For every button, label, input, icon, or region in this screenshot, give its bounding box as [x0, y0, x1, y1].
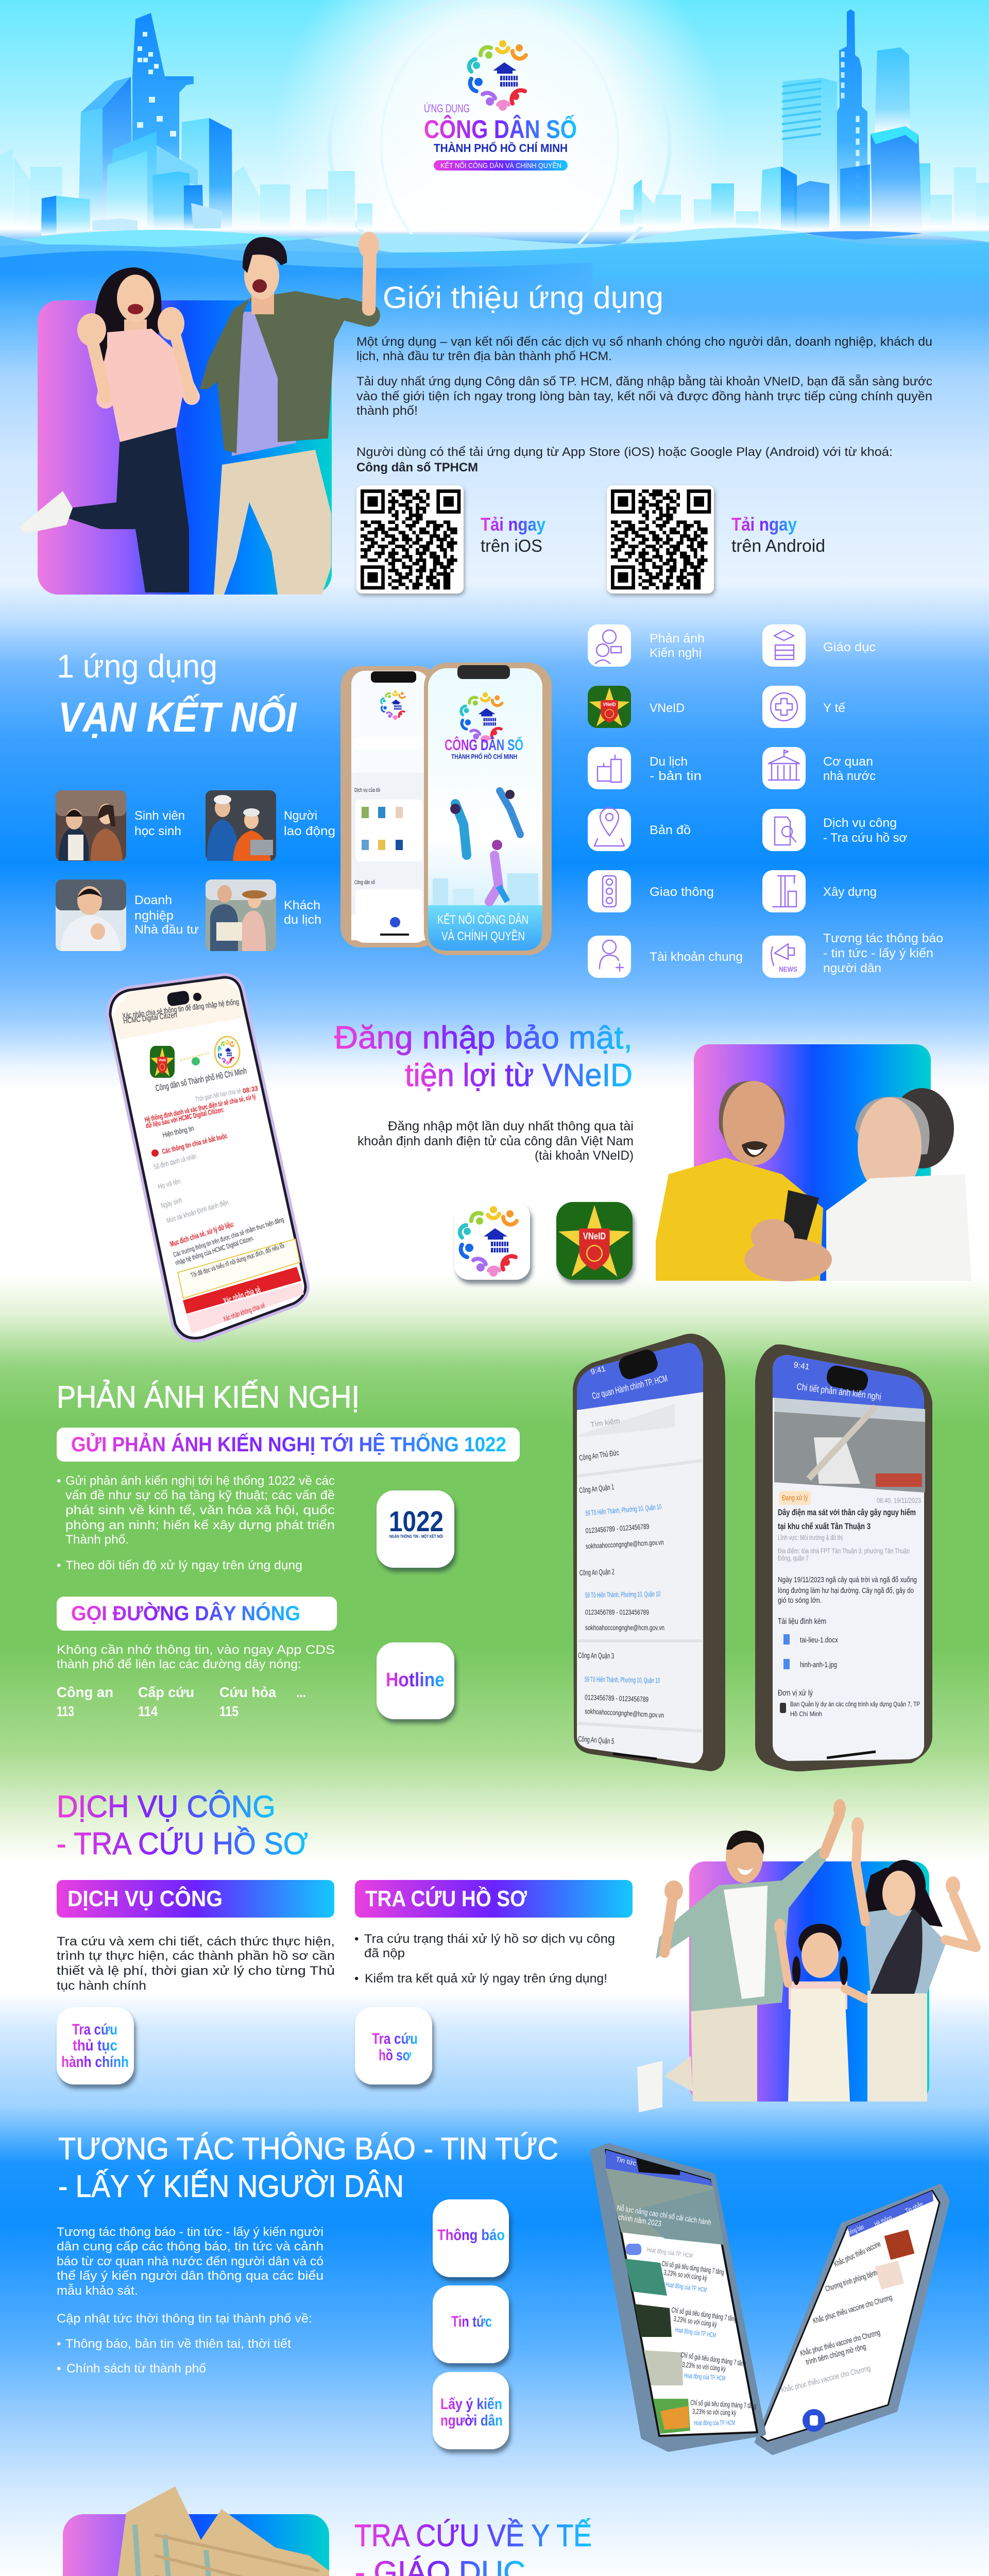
feedback bullets: • — [57, 1474, 61, 1488]
tilted phone: VNeID consent screen: HCMC Digital Citizen — [123, 1010, 178, 1026]
tile: 1022: NGÀN THÔNG TIN - MỘT KẾT NỐI — [389, 1534, 443, 1539]
tilted phone: VNeID consent screen: Hiện thông tin — [162, 1124, 195, 1139]
tile: Dịch vụ công tra cứu hồ sơ: Dịch vụ công — [823, 816, 897, 830]
notification paragraph: mẫu khảo sát. — [57, 2284, 138, 2298]
tile: Giao thông: Giao thông — [650, 885, 714, 899]
tile: tra cứu hồ sơ: hồ sơ — [379, 2047, 412, 2064]
hotline numbers: 115 — [219, 1703, 238, 1719]
panel: family photo — [637, 1799, 976, 2112]
phone: feedback detail: Tài liệu đính kèm — [778, 1617, 826, 1626]
feedback bullets: phát sinh về kinh tế, văn hóa xã hội, quốc — [65, 1503, 335, 1517]
phone: news list: Tin tức — [615, 2155, 637, 2167]
VNeID text — [357, 1119, 634, 1163]
intro paragraphs: Tải duy nhất ứng dụng Công dân số TP. HCM, đăng nhập bằng tài khoản VNeID, bạn đã sẵn sàng bước — [356, 374, 932, 388]
tile: tra cứu thủ tục hành chính: thủ tục — [73, 2037, 117, 2054]
hotline numbers: Cấp cứu — [138, 1684, 194, 1700]
phone: news list: Hoạt động của TP. HCM — [694, 2419, 735, 2427]
hotline text — [57, 1643, 335, 1671]
notification paragraph: • — [57, 2362, 61, 2376]
tilted phone: VNeID consent screen: 08:33 — [242, 1084, 259, 1095]
tile: Dịch vụ công tra cứu hồ sơ: - Tra cứu hồ sơ — [823, 831, 907, 845]
records bullets: Tra cứu trạng thái xử lý hồ sơ dịch vụ công — [364, 1932, 615, 1946]
tile: Bản đồ — [588, 808, 691, 851]
persona label: Khách — [284, 899, 320, 912]
phone: agencies list: Công An Thủ Đức — [578, 1448, 620, 1463]
tile: Cơ quan nhà nước: Cơ quan — [823, 755, 873, 769]
persona: sinh viên học sinh — [56, 790, 185, 861]
public service paragraph: tục hành chính — [57, 1979, 146, 1993]
feedback bullets: phòng an ninh; hiến kế xây dựng phát triển — [65, 1518, 335, 1532]
woman jumping — [19, 267, 192, 592]
section heading: Dịch vụ công: - TRA CỨU HỒ SƠ — [57, 1826, 308, 1861]
hotline text: Không cần nhớ thông tin, vào ngay App CDS — [57, 1643, 335, 1657]
phone: news list: Chỉ số giá tiêu dùng tháng 7 tăng — [671, 2306, 738, 2323]
phone: agencies list: Công An Quận 3 — [578, 1651, 614, 1660]
persona label: lao động — [284, 824, 335, 838]
tilted phone: VNeID consent screen: Mức tài khoản Định danh điện — [165, 1198, 229, 1225]
feature tiles grid — [588, 624, 943, 978]
persona label — [134, 893, 199, 937]
persona label: Nhà đầu tư — [134, 923, 199, 937]
feedback bullets: Thành phố. — [65, 1533, 129, 1547]
section: 1 ứng dụng vạn kết nối heading — [57, 648, 297, 741]
man jumping — [200, 232, 379, 595]
public service paragraph: Tra cứu và xem chi tiết, cách thức thực hiện, — [57, 1935, 335, 1948]
phone: notifications list: Khắc phục thiếu vaccine cho Chương — [780, 2364, 872, 2395]
phone: feedback detail: 08:40, 19/11/2023 — [877, 1496, 921, 1504]
logo caption: ỨNG DỤNG — [424, 102, 470, 115]
VNeID text: (tài khoản VNeID) — [535, 1148, 634, 1163]
phone: agencies list: Công An Quận 5 — [578, 1735, 615, 1746]
banner: tra cứu hồ sơ: TRA CỨU HỒ SƠ — [365, 1886, 527, 1911]
tilted phone: VNeID consent screen: Các trường thông tin trên được chia sẻ nhằm thực hiện đăng — [172, 1215, 285, 1259]
hotline numbers: 114 — [138, 1703, 158, 1719]
logo city: THÀNH PHỐ HỒ CHÍ MINH — [434, 141, 568, 155]
tile: Tương tác thông báo: - tin tức - lấy ý kiến — [823, 946, 933, 960]
section heading: Dịch vụ công — [57, 1789, 308, 1861]
phone: news list: 3,23% so với cùng kỳ — [692, 2407, 736, 2417]
banner: gửi phản ánh: GỬI PHẢN ÁNH KIẾN NGHỊ TỚI HỆ THỐNG 1022 — [71, 1432, 506, 1456]
man in yellow shirt — [656, 1081, 823, 1281]
tile: Du lịch bản tin: - bản tin — [650, 769, 702, 783]
persona label: du lịch — [284, 913, 321, 927]
tile: tra cứu thủ tục hành chính: hành chính — [61, 2054, 129, 2071]
tile: Tương tác thông báo — [762, 931, 943, 978]
phone: agencies list: 59 Tô Hiến Thành, Phường 10, Quận 10 — [585, 1675, 660, 1685]
persona label: Sinh viên — [134, 809, 185, 823]
persona label: học sinh — [134, 824, 181, 838]
phones: app splash and home — [340, 663, 552, 955]
tilted phone: VNeID consent screen: Ngày sinh — [160, 1196, 183, 1210]
phone: agencies list: 59 Tô Hiến Thành, Phường 10, Quận 10 — [585, 1589, 660, 1599]
tile: Hotline — [377, 1642, 454, 1719]
phone: feedback detail: tai-lieu-1.docx — [800, 1636, 838, 1645]
hotline numbers: Cứu hỏa — [219, 1684, 276, 1700]
phone: agencies list: sokhoahoccongnghe@hcm.gov.vn — [585, 1538, 664, 1550]
phone: agencies list: sokhoahoccongnghe@hcm.gov.vn — [585, 1707, 664, 1719]
phone: news list — [593, 2146, 763, 2449]
tile: Phản ánh kiến nghị: Kiến nghị — [650, 646, 702, 660]
phone: agencies list: Công An Quận 2 — [579, 1568, 615, 1578]
tile: Dịch vụ công tra cứu hồ sơ — [762, 809, 907, 851]
section heading: Tra cứu về y tế — [354, 2518, 592, 2576]
banner: tra cứu hồ sơ — [355, 1880, 633, 1918]
tile: Xây dựng — [762, 870, 877, 912]
phone: feedback detail: 9:41 — [793, 1361, 810, 1371]
phone: feedback detail: Đông, quận 7 — [778, 1554, 809, 1562]
phone in hand — [744, 1190, 832, 1281]
tile: VNeID — [588, 686, 685, 728]
tile: Xây dựng: Xây dựng — [823, 885, 877, 899]
phone: news list: 3,23% so với cùng kỳ — [663, 2268, 708, 2282]
persona label — [284, 809, 335, 838]
faint right skyline — [620, 163, 989, 227]
tile: Cơ quan nhà nước — [762, 747, 876, 789]
heading: Đăng nhập bảo mật — [334, 1020, 633, 1093]
tilted phone: VNeID consent screen — [110, 977, 305, 1338]
tile: Tin tức: Tin tức — [451, 2313, 492, 2330]
app icon: Công dân số — [454, 1202, 530, 1280]
records bullets: đã nộp — [364, 1946, 405, 1960]
section heading: Tương tác thông báo: - LẤY Ý KIẾN NGƯỜI DÂN — [58, 2169, 404, 2204]
intro paragraphs: Một ứng dụng – vạn kết nối đến các dịch vụ số nhanh chóng cho người dân, doanh nghiệp, khách du — [356, 335, 932, 349]
section: 1 ứng dụng vạn kết nối heading: 1 ứng dụng — [57, 648, 217, 685]
tile: Phản ánh kiến nghị — [588, 624, 705, 667]
heading: Đăng nhập bảo mật: Đăng nhập bảo mật, — [334, 1020, 633, 1056]
tile: Thông báo — [433, 2199, 509, 2277]
phone: agencies list: 9:41 — [590, 1364, 606, 1377]
tile: Giáo dục: Giáo dục — [823, 640, 876, 654]
section heading: Tương tác thông báo: TƯƠNG TÁC THÔNG BÁO - TIN TỨC — [58, 2131, 558, 2166]
notification paragraph: Cập nhật tức thời thông tin tại thành phố về: — [57, 2312, 312, 2326]
tile: 1022 — [377, 1490, 454, 1568]
tilted phone: VNeID consent screen: dữ liệu sau với HCMC Digital Citizen: — [145, 1105, 225, 1130]
notification paragraph: • — [57, 2337, 61, 2351]
label platform: trên Android — [731, 536, 825, 556]
persona: khách du lịch — [206, 879, 321, 951]
phone: news list: Chỉ số giá tiêu dùng tháng 7 tăng — [690, 2398, 757, 2410]
tilted phone: VNeID consent screen: Xác nhận chia sẻ — [222, 1284, 262, 1307]
woman in white shirt — [826, 1088, 971, 1281]
phone: feedback detail: Ngày 19/11/2023 ngã cây quá trời và ngã đổ xuống — [778, 1575, 917, 1584]
tile: Giao thông — [588, 870, 714, 912]
phone: news list: Chỉ số giá tiêu dùng tháng 7 tăng — [680, 2350, 747, 2368]
phone: agencies list: Cơ quan Hành chính TP. HCM — [591, 1373, 669, 1401]
tilted phone: VNeID consent screen: Công dân số Thành phố Hồ Chí Minh — [155, 1066, 247, 1093]
front phone splash screen: VÀ CHÍNH QUYỀN — [441, 929, 525, 943]
QR download iOS — [356, 485, 545, 594]
phone: news list: Hoạt động của TP. HCM — [684, 2371, 726, 2382]
phone: feedback detail: lòng đường làm hư hại đường. Cây ngã đổ, gây do — [778, 1586, 914, 1595]
back phone home screen — [340, 666, 438, 947]
persona label — [134, 809, 185, 838]
records bullets: • — [354, 1932, 359, 1946]
phone: feedback detail: Đơn vị xử lý — [778, 1689, 813, 1698]
notification paragraph: báo từ cơ quan nhà nước đến người dân và có — [57, 2255, 323, 2268]
phone: notifications list: Khắc phục thiếu vaccine — [833, 2240, 882, 2269]
intro paragraphs: Công dân số TPHCM — [356, 461, 478, 474]
feedback bullets: • — [57, 1558, 61, 1572]
faint left skyline — [0, 148, 372, 230]
app icon: VNeID — [556, 1202, 633, 1280]
panel: hospital and school photo — [0, 2486, 329, 2576]
front phone splash screen: CÔNG DÂN SỐ — [445, 736, 523, 754]
phone: agencies list: Tìm kiếm — [590, 1416, 620, 1429]
logo tagline pill: KẾT NỐI CÔNG DÂN VÀ CHÍNH QUYỀN — [440, 161, 561, 170]
man — [637, 1799, 846, 2112]
hotline numbers: 113 — [57, 1703, 74, 1719]
tile: Tài khoản chung — [588, 936, 743, 978]
tile: 1022: 1022 — [389, 1505, 444, 1537]
notification paragraph — [57, 2225, 323, 2376]
phone: feedback detail: Lĩnh vực: Môi trường & đô thị — [778, 1533, 843, 1541]
section heading: Dịch vụ công: DỊCH VỤ CÔNG — [57, 1789, 276, 1824]
phone: notifications list: Chương trình phòng bệnh — [824, 2268, 878, 2294]
notification paragraph: thể lấy ý kiến người dân thông qua các biểu — [57, 2269, 323, 2283]
phone: agencies list: 59 Tô Hiến Thành, Phường 10, Quận 10 — [585, 1502, 662, 1517]
hotline text: thành phố để liên lạc các đường dây nóng: — [57, 1657, 301, 1671]
tilted phone: VNeID consent screen: Mục đích chia sẻ, xử lý dữ liệu: — [169, 1219, 235, 1249]
tile: Tương tác thông báo: Tương tác thông báo — [823, 931, 943, 945]
hotline numbers: ... — [296, 1684, 306, 1700]
tile: Lấy ý kiến người dân — [433, 2372, 509, 2449]
phone: agencies list: 0123456789 - 0123456789 — [585, 1522, 650, 1535]
back phone home screen: Công dân số — [354, 879, 375, 886]
label: Tải ngay — [481, 514, 545, 535]
feedback bullets: vấn đề như sự cố hạ tầng kỹ thuật; các vấn đề — [65, 1488, 335, 1502]
phone: feedback detail: Đang xử lý — [782, 1494, 808, 1502]
phone: news list: Hoạt động của TP. HCM — [666, 2280, 707, 2294]
label platform: trên iOS — [481, 536, 542, 556]
section: 1 ứng dụng vạn kết nối heading: VẠN KẾT NỐI — [58, 693, 297, 741]
records bullets — [354, 1932, 615, 1986]
section heading: Tra cứu về y tế: TRA CỨU VỀ Y TẾ — [354, 2518, 592, 2553]
tilted phone: VNeID consent screen: Hệ thống định danh và xác thực điện tử sẽ chia sẻ, xử lý — [144, 1092, 257, 1124]
tile: Lấy ý kiến người dân: Lấy ý kiến — [440, 2396, 502, 2413]
intro paragraphs: lịch, nhà đầu tư trên địa bàn thành phố HCM. — [356, 349, 612, 363]
phone: notifications list — [757, 2186, 948, 2453]
feedback bullets: Theo dõi tiến độ xử lý ngay trên ứng dụng — [65, 1558, 302, 1572]
phone: notifications list: trình tiêm chủng mở rộng — [805, 2342, 867, 2367]
banner: dịch vụ công: DỊCH VỤ CÔNG — [67, 1885, 223, 1911]
phone: agencies list — [573, 1334, 725, 1771]
banner: dịch vụ công — [57, 1880, 334, 1918]
persona: doanh nghiệp nhà đầu tư — [56, 879, 199, 951]
phone: feedback detail: Dây điện ma sát với thân cây gây nguy hiểm — [778, 1507, 916, 1517]
phone: notifications list: Khắc phục thiếu vaccine cho Chương — [799, 2328, 881, 2358]
hospital tower — [116, 2486, 329, 2576]
public service paragraph: trình tự thực hiện, các thành phần hồ sơ cần — [57, 1949, 335, 1963]
notification paragraph: dân cung cấp các thông báo, tin tức và cảnh — [57, 2240, 323, 2253]
notification paragraph: Thông báo, bản tin về thiên tai, thời tiết — [65, 2337, 291, 2351]
persona label: Doanh — [134, 893, 172, 907]
Bitexco tower group — [41, 13, 232, 235]
phone: news list: Nỗ lực nâng cao chỉ số cải cách hành — [616, 2204, 712, 2227]
logo name: CÔNG DÂN SỐ — [424, 114, 577, 144]
heading: Đăng nhập bảo mật: tiện lợi từ VNeID — [405, 1058, 633, 1093]
front phone splash screen: THÀNH PHỐ HỒ CHÍ MINH — [451, 753, 517, 760]
phone: notifications list: Thông báo — [845, 2223, 865, 2238]
tile: Giáo dục — [762, 624, 876, 667]
tile: Cơ quan nhà nước: nhà nước — [823, 769, 876, 783]
tile: tra cứu hồ sơ — [355, 2007, 432, 2084]
Landmark tower group — [760, 9, 922, 230]
phone: feedback detail — [755, 1345, 932, 1771]
tile: Lấy ý kiến người dân: người dân — [440, 2412, 503, 2429]
banner: gọi đường dây nóng: GỌI ĐƯỜNG DÂY NÓNG — [71, 1601, 300, 1625]
phone: news list: 3,23% so với cùng kỳ — [673, 2314, 718, 2329]
feedback bullets — [57, 1474, 335, 1572]
tile: Du lịch bản tin — [588, 747, 702, 789]
notification paragraph: Tương tác thông báo - tin tức - lấy ý kiến người — [57, 2225, 323, 2239]
intro paragraphs: vào thế giới tiện ích ngay trong lòng bàn tay, kết nối và được đồng hành trực tiếp cùng chính quyền — [356, 389, 932, 403]
label: Tải ngay — [731, 514, 797, 535]
tilted phone: VNeID consent screen: nhập hệ thống của HCMC Digital Citizen. — [174, 1234, 255, 1267]
tile: Y tế: Y tế — [823, 701, 846, 715]
notification paragraph: Chính sách từ thành phố — [66, 2362, 206, 2376]
tile: Bản đồ: Bản đồ — [650, 823, 691, 837]
tile: Tài khoản chung: Tài khoản chung — [650, 950, 743, 964]
header sky glow and city skyline — [0, 0, 989, 294]
VNeID text: Đăng nhập một lần duy nhất thông qua tài — [388, 1119, 634, 1133]
phone: agencies list: Công An Quận 1 — [579, 1483, 615, 1495]
banner: gọi đường dây nóng — [57, 1597, 337, 1631]
tile: VNeID: VNeID — [650, 701, 685, 715]
VNeID text: khoản định danh điện tử của công dân Việt Nam — [357, 1134, 634, 1148]
records bullets: Kiểm tra kết quả xử lý ngay trên ứng dụng! — [365, 1972, 607, 1986]
persona label — [284, 899, 321, 927]
persona: người lao động — [206, 790, 335, 861]
panel: elderly couple photo — [656, 1044, 971, 1281]
intro paragraphs: Người dùng có thể tải ứng dụng từ App Store (iOS) hoặc Google Play (Android) với từ khoá: — [356, 445, 893, 459]
girl — [774, 1919, 865, 2102]
phone: news list: 3,23% so với cùng kỳ — [682, 2360, 726, 2373]
persona label: Người — [284, 809, 317, 823]
intro paragraphs — [356, 335, 932, 474]
front phone splash screen: KẾT NỐI CÔNG DÂN — [437, 912, 528, 927]
phone: feedback detail: Chi tiết phản ánh kiến nghị — [796, 1381, 882, 1402]
tilted phone: VNeID consent screen: Tôi đã đọc và hiểu rõ nội dung mục đích, đối nếu lỗi — [190, 1242, 285, 1279]
records bullets: • — [354, 1972, 359, 1986]
header waves — [0, 228, 989, 309]
section heading: Phản ánh kiến nghị: PHẢN ÁNH KIẾN NGHỊ — [57, 1380, 360, 1414]
tile: tra cứu hồ sơ: Tra cứu — [372, 2030, 418, 2047]
phone: news list: Chỉ số giá tiêu dùng tháng 7 tăng — [661, 2259, 725, 2276]
tilted phone: VNeID consent screen: Họ và tên — [157, 1177, 181, 1191]
tile: Du lịch bản tin: Du lịch — [650, 755, 688, 769]
heading: Giới thiệu ứng dụng: Giới thiệu ứng dụng — [383, 280, 663, 315]
tile: Thông báo: Thông báo — [437, 2227, 505, 2244]
tilted phone: VNeID consent screen: Số định danh cá nhân — [153, 1151, 197, 1171]
phone: agencies list: sokhoahoccongnghe@hcm.gov.vn — [585, 1623, 664, 1632]
phone: agencies list: 0123456789 - 0123456789 — [585, 1693, 649, 1703]
hotline numbers: Công an — [57, 1684, 113, 1700]
tile: tra cứu thủ tục hành chính: Tra cứu — [72, 2021, 117, 2038]
tilted phone: VNeID consent screen: Thời gian hết hạn chia sẻ — [195, 1087, 242, 1103]
phone: feedback detail: Địa điểm: tòa nhà FPT Tân Thuận 3, phường Tân Thuận — [778, 1547, 910, 1555]
phone: agencies list: 0123456789 - 0123456789 — [585, 1608, 649, 1616]
phone: news list: Hoạt động của TP. HCM — [646, 2246, 693, 2259]
front phone splash screen — [424, 663, 552, 955]
phone: notifications list: Khắc phục thiếu vaccine cho Chương — [812, 2293, 893, 2326]
panel: intro hero photo — [19, 232, 379, 595]
tile: tra cứu thủ tục hành chính — [57, 2007, 134, 2084]
phone: feedback detail: Hồ Chí Minh — [790, 1710, 822, 1718]
tile: Y tế — [762, 686, 846, 728]
phone: feedback detail: Ban Quản lý dự án các công trình xây dựng Quận 7, TP — [790, 1700, 920, 1708]
woman — [851, 1817, 976, 2102]
phone: news list: Hoạt động của TP. HCM — [675, 2326, 717, 2339]
section heading: Tương tác thông báo — [58, 2131, 558, 2204]
tilted phone: VNeID consent screen: Xác nhận không chia sẻ — [222, 1301, 266, 1323]
tile: Tương tác thông báo: người dân — [823, 961, 881, 975]
back phone home screen: Dịch vụ của tôi — [354, 787, 380, 793]
phone: feedback detail: tại khu chế xuất Tân Thuận 3 — [778, 1521, 871, 1531]
banner: gửi phản ánh — [57, 1428, 520, 1462]
feedback bullets: Gửi phản ánh kiến nghị tới hệ thống 1022 về các — [65, 1474, 335, 1488]
hotline numbers — [57, 1684, 306, 1719]
public service paragraph: thiết và lệ phí, thời gian xử lý cho từng Thủ — [57, 1964, 335, 1978]
QR download Android — [607, 485, 825, 594]
persona label: nghiệp — [134, 909, 174, 923]
public service paragraph — [57, 1935, 335, 1993]
phone: feedback detail: hinh-anh-1.jpg — [800, 1660, 837, 1669]
tile: Tương tác thông báo: NEWS — [779, 965, 797, 973]
tile: Hotline: Hotline — [386, 1669, 445, 1691]
phone: feedback detail: gió to sóng lớn. — [778, 1596, 822, 1605]
tile: Tin tức — [433, 2285, 509, 2363]
tilted phone: VNeID consent screen: Xác nhận chia sẻ thông tin để đăng nhập hệ thống — [122, 997, 240, 1021]
tile: Phản ánh kiến nghị: Phản ánh — [650, 632, 705, 646]
intro paragraphs: thành phố! — [356, 404, 418, 418]
logo: Công dân số — [424, 40, 577, 171]
tilted phone: VNeID consent screen: Các thông tin chia sẻ bắt buộc — [161, 1131, 228, 1156]
phone: notifications list: Tin nhắn — [904, 2200, 924, 2215]
phone: notifications list: Hệ thống — [873, 2213, 893, 2228]
phone: news list: chính năm 2023 — [617, 2213, 662, 2228]
